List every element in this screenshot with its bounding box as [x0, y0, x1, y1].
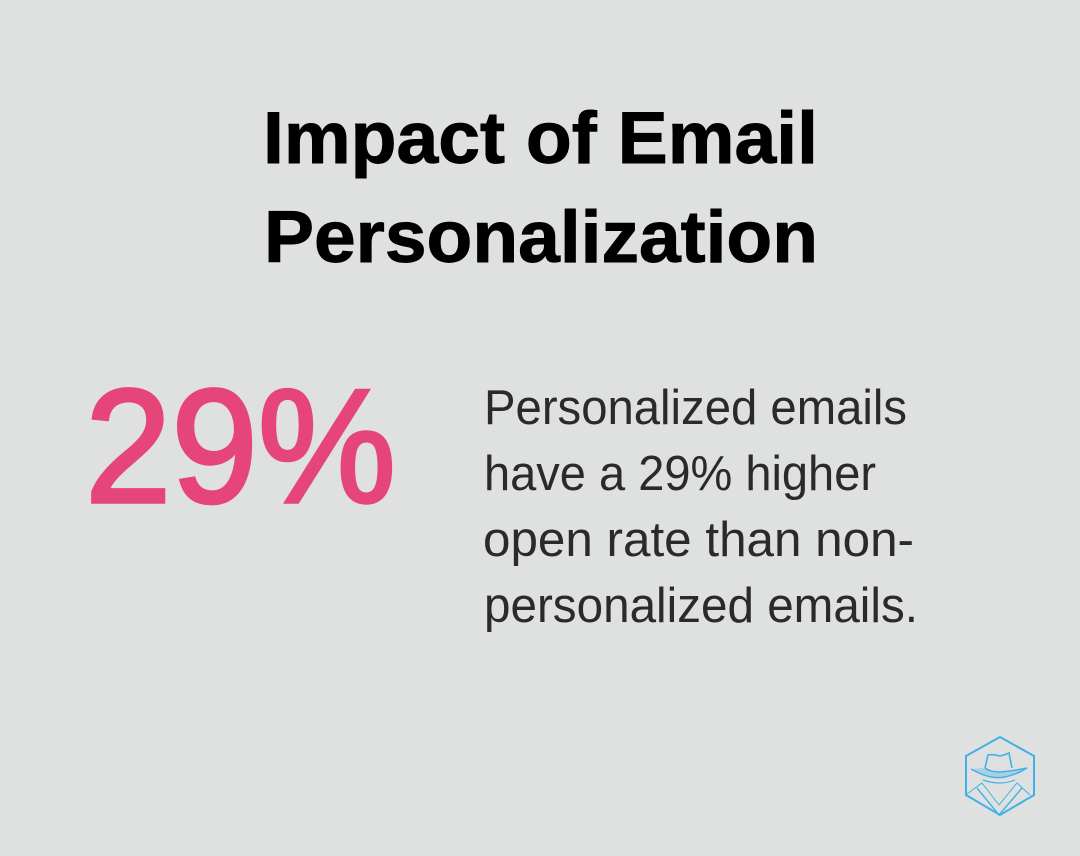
description text — [483, 381, 918, 633]
icon: logo, spy in hat inside hexagon — [966, 737, 1034, 815]
title: Personalization — [264, 197, 818, 278]
description text: have a 29% higher — [484, 447, 876, 501]
description text: personalized emails. — [484, 579, 918, 633]
big statistic: 29%: 29% — [85, 356, 396, 537]
title — [263, 98, 818, 278]
description text: Personalized emails — [484, 381, 907, 435]
description text: open rate than non- — [483, 513, 914, 567]
title: Impact of Email — [263, 98, 818, 179]
